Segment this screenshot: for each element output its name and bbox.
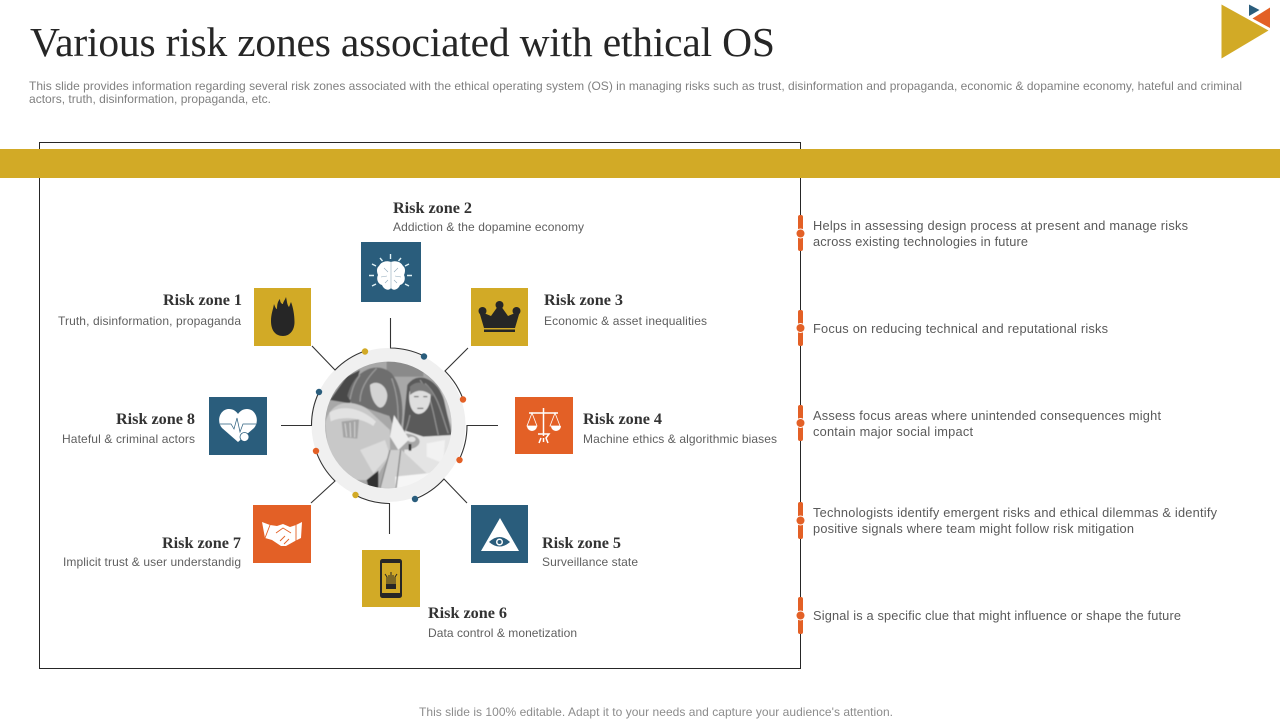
icon: all-seeing eye	[471, 505, 528, 563]
marker: item 1	[796, 215, 805, 251]
risk zone 1 label: Truth, disinformation, propaganda	[58, 314, 241, 328]
risk zone 7 label: Implicit trust & user understandig	[63, 555, 241, 569]
marker: item 5	[796, 597, 805, 634]
risk zone 1 label: Risk zone 1	[163, 291, 242, 309]
risk zone 2 label	[393, 199, 584, 234]
risk zone 7 label	[63, 534, 241, 569]
risk zone 5 label	[542, 534, 638, 569]
description 2: Focus on reducing technical and reputational risks	[813, 321, 1108, 336]
risk zone 5 label: Surveillance state	[542, 555, 638, 569]
risk zone 2 label: Addiction & the dopamine economy	[393, 220, 584, 234]
description 4: positive signals where team might follow risk mitigation	[813, 521, 1134, 536]
title: Various risk zones associated with ethical OS	[30, 19, 775, 65]
risk zone 8 label	[62, 410, 195, 446]
connector lines with dots	[281, 318, 498, 534]
risk zone 8 label: Risk zone 8	[116, 410, 195, 428]
footer note: This slide is 100% editable. Adapt it to your needs and capture your audience's attention.	[419, 705, 893, 719]
logo icon	[1222, 4, 1270, 58]
description 4: Technologists identify emergent risks and ethical dilemmas & identify	[813, 505, 1218, 520]
description 4	[813, 505, 1218, 536]
marker: item 3	[796, 405, 805, 441]
description 1	[813, 218, 1188, 249]
marker: item 4	[796, 502, 805, 539]
risk zone 4 label	[583, 410, 777, 446]
risk zone 6 label	[428, 604, 577, 640]
risk zone 8 label: Hateful & criminal actors	[62, 432, 195, 446]
central diagram	[281, 318, 498, 534]
subtitle text: This slide provides information regarding several risk zones associated with the ethical operating system (OS) in managing risks such as trust, disinformation and propaganda, economic & dopamine economy, hateful and criminal	[29, 79, 1242, 93]
description 1: across existing technologies in future	[813, 234, 1028, 249]
risk zone 4 label: Machine ethics & algorithmic biases	[583, 432, 777, 446]
gold band	[0, 149, 1280, 178]
icon: flame	[254, 288, 311, 346]
icon: brain	[361, 242, 421, 302]
risk zone 5 label: Risk zone 5	[542, 534, 621, 552]
description 3: contain major social impact	[813, 424, 973, 439]
risk zone 4 label: Risk zone 4	[583, 410, 662, 428]
icon: handshake	[253, 505, 311, 563]
photo ring	[312, 348, 466, 502]
subtitle text	[29, 79, 1242, 106]
marker: item 2	[796, 310, 805, 346]
risk zone 3 label: Economic & asset inequalities	[544, 314, 707, 328]
description 3	[813, 408, 1161, 439]
description 3: Assess focus areas where unintended consequences might	[813, 408, 1161, 423]
panel frame	[40, 142, 800, 668]
icon: scales of justice	[515, 397, 573, 454]
risk zone 1 label	[58, 291, 242, 328]
risk zone 7 label: Risk zone 7	[162, 534, 241, 552]
icon: crown	[471, 288, 528, 346]
icon: heart with pulse	[209, 397, 267, 455]
risk zone 6 label: Data control & monetization	[428, 626, 577, 640]
risk zone 3 label: Risk zone 3	[544, 291, 623, 309]
subtitle text: actors, truth, disinformation, propaganda, etc.	[29, 92, 271, 106]
description 1: Helps in assessing design process at present and manage risks	[813, 218, 1188, 233]
risk zone 6 label: Risk zone 6	[428, 604, 507, 622]
risk zone 2 label: Risk zone 2	[393, 199, 472, 217]
description 5: Signal is a specific clue that might influence or shape the future	[813, 608, 1181, 623]
photo	[323, 360, 457, 490]
risk zone 3 label	[544, 291, 707, 328]
icon: smartphone	[362, 550, 420, 607]
